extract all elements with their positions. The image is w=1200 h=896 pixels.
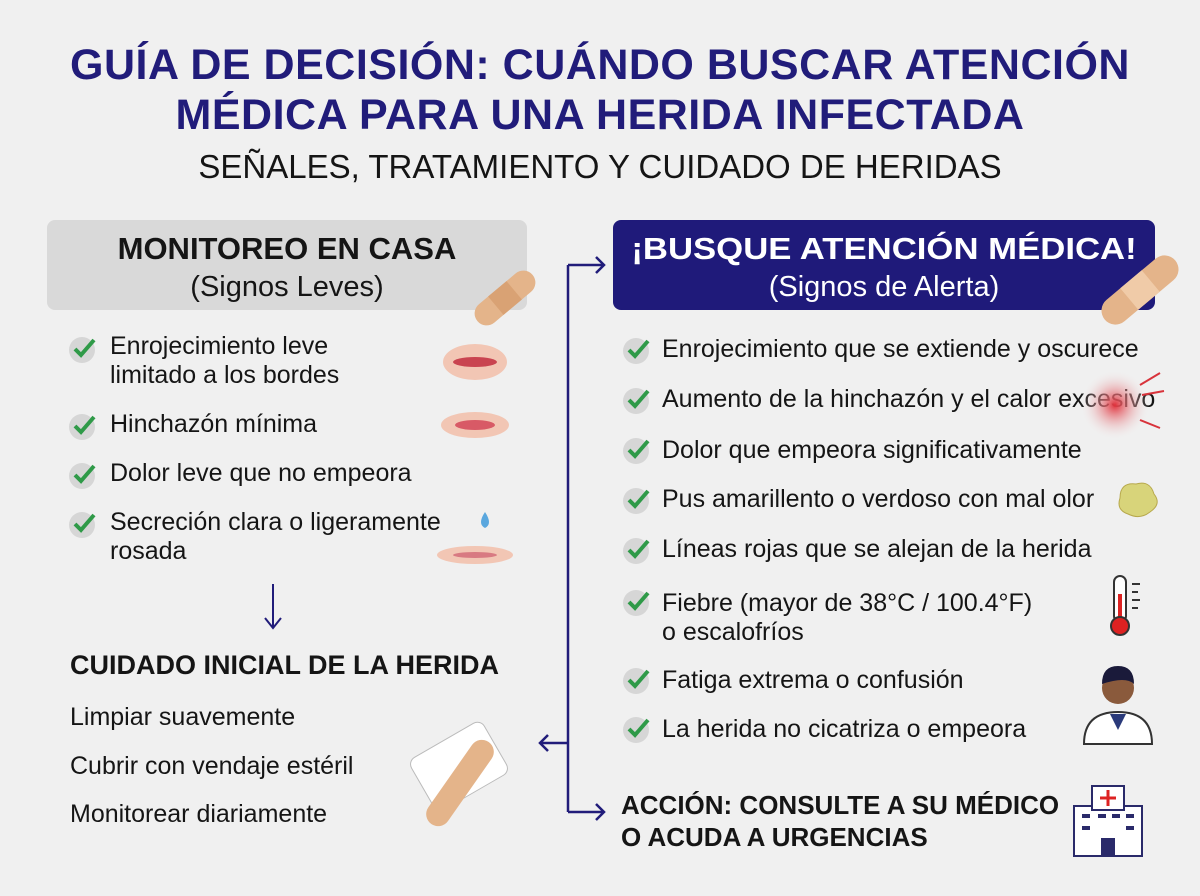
icons: mild wounds bbox=[437, 344, 513, 564]
subtitle: SEÑALES, TRATAMIENTO Y CUIDADO DE HERIDAS bbox=[198, 148, 1002, 185]
list: warning signs bbox=[623, 335, 1155, 743]
section: initial care: CUIDADO INICIAL DE LA HERIDA bbox=[70, 650, 499, 680]
list: warning signs: Pus amarillento o verdoso con mal olor bbox=[662, 485, 1094, 513]
icon: thermometer bbox=[1110, 575, 1140, 636]
list: warning signs: Fiebre (mayor de 38°C / 100.4°F) bbox=[662, 589, 1032, 617]
section: initial care: Limpiar suavemente bbox=[70, 703, 295, 731]
title: GUÍA DE DECISIÓN: CUÁNDO BUSCAR ATENCIÓN bbox=[70, 41, 1130, 89]
panel header: monitoreo en casa bbox=[47, 220, 527, 310]
panel header: monitoreo en casa: (Signos Leves) bbox=[190, 271, 384, 303]
list: mild signs: Secreción clara o ligeramente bbox=[110, 508, 441, 536]
icon: bandage right bbox=[1102, 255, 1178, 325]
callout: action bbox=[621, 790, 1059, 852]
list: mild signs bbox=[69, 332, 441, 565]
list: warning signs: La herida no cicatriza o empeora bbox=[662, 715, 1026, 743]
section: initial care: Monitorear diariamente bbox=[70, 800, 327, 828]
callout: action: O ACUDA A URGENCIAS bbox=[621, 822, 928, 852]
panel header: monitoreo en casa: MONITOREO EN CASA bbox=[118, 231, 456, 266]
icon: inflamed wound bbox=[1082, 372, 1164, 432]
list: warning signs: Aumento de la hinchazón y el calor excesivo bbox=[662, 385, 1155, 413]
list: mild signs: rosada bbox=[110, 537, 186, 565]
list: mild signs: Dolor leve que no empeora bbox=[110, 459, 412, 487]
icon: pus bbox=[1118, 482, 1158, 518]
arrow: down bbox=[264, 584, 282, 630]
icon: bandage left bbox=[474, 270, 536, 326]
callout: action: ACCIÓN: CONSULTE A SU MÉDICO bbox=[621, 790, 1059, 820]
list: warning signs: Enrojecimiento que se extiende y oscurece bbox=[662, 335, 1139, 363]
list: warning signs: Fatiga extrema o confusión bbox=[662, 666, 964, 694]
icon: doctor bbox=[1083, 666, 1153, 745]
list: mild signs: Enrojecimiento leve bbox=[110, 332, 328, 360]
panel header: busque atención: ¡BUSQUE ATENCIÓN MÉDICA! bbox=[631, 231, 1137, 266]
section: initial care bbox=[70, 650, 499, 828]
list: mild signs: limitado a los bordes bbox=[110, 361, 339, 389]
panel header: busque atención: (Signos de Alerta) bbox=[769, 271, 999, 303]
icon: hospital bbox=[1073, 785, 1143, 857]
list: warning signs: Dolor que empeora significativamente bbox=[662, 436, 1082, 464]
section: initial care: Cubrir con vendaje estéril bbox=[70, 752, 353, 780]
title bbox=[70, 41, 1130, 139]
list: mild signs: Hinchazón mínima bbox=[110, 410, 317, 438]
icon: gauze and bandage bbox=[410, 722, 508, 826]
panel header: busque atención bbox=[613, 220, 1155, 310]
title: MÉDICA PARA UNA HERIDA INFECTADA bbox=[176, 91, 1024, 139]
list: warning signs: o escalofríos bbox=[662, 618, 804, 646]
arrows: connector bbox=[538, 256, 606, 821]
list: warning signs: Líneas rojas que se alejan de la herida bbox=[662, 535, 1091, 563]
